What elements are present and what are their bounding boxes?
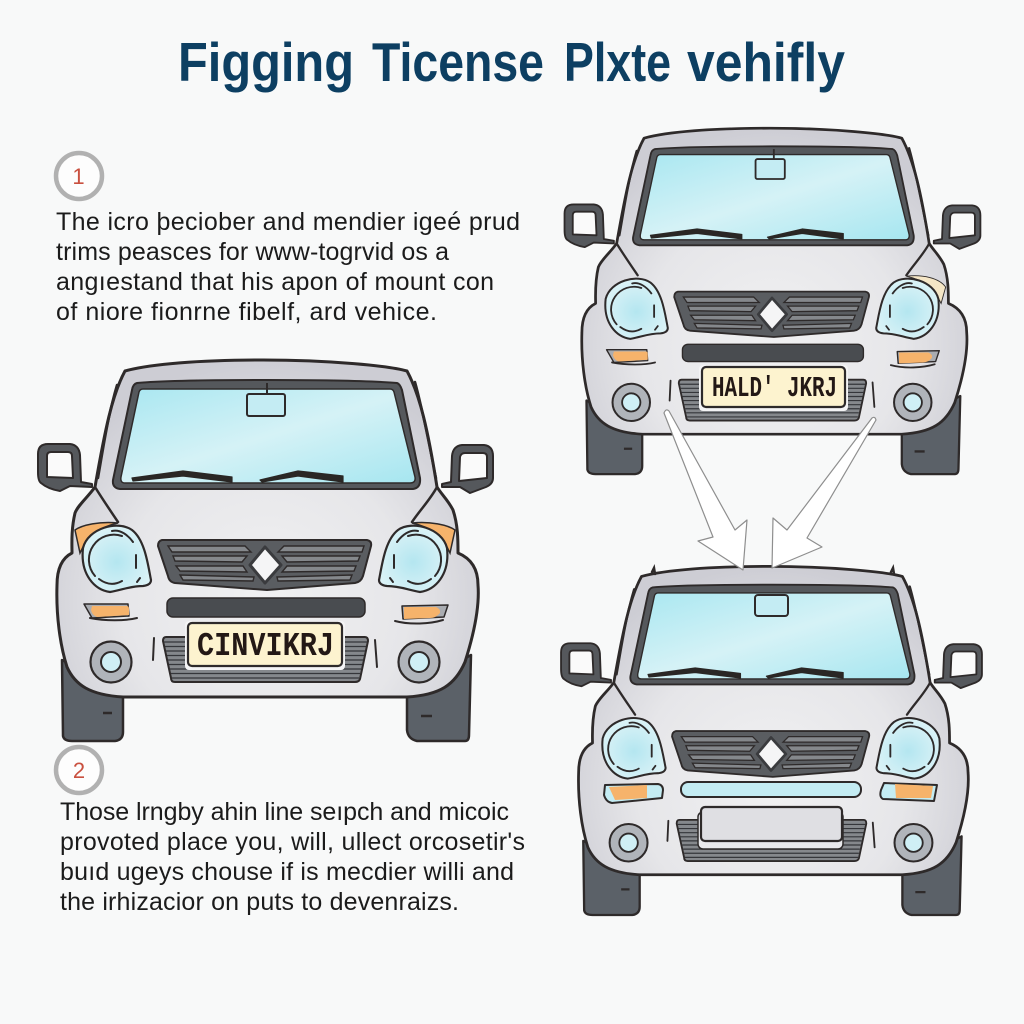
car 2: top right car with plate xyxy=(565,128,980,474)
car 2 licence plate: HALD' JKRJ xyxy=(712,372,837,405)
car 3: bottom right car with blank plate xyxy=(561,566,982,915)
title: vehifly xyxy=(687,31,845,93)
car 1 licence plate xyxy=(185,621,345,670)
title xyxy=(178,31,845,93)
car 2 rear-view mirror xyxy=(756,149,785,179)
car 1 windshield and wipers xyxy=(113,380,420,489)
car 3 rear-view mirror xyxy=(755,595,788,616)
car 2 fog lights xyxy=(613,384,932,421)
step 1 text block xyxy=(56,208,520,326)
car 1 licence plate: CINVIKRJ xyxy=(197,628,334,665)
car 3 grille xyxy=(672,731,869,777)
car 3 left headlight xyxy=(602,718,666,779)
car 3 fog lights xyxy=(610,824,932,861)
car 2 grille xyxy=(674,292,869,337)
step 2 badge: 2 xyxy=(73,758,85,783)
step 1 text block: trims peasces for www-togrvid os a xyxy=(56,238,449,266)
car 2 body xyxy=(582,128,967,434)
car 3 wheels xyxy=(583,836,962,915)
car 3 right headlight xyxy=(876,718,940,779)
car 2 right headlight xyxy=(876,279,939,339)
car 3 lower grille xyxy=(677,820,866,861)
car 3 left turn signal xyxy=(604,784,663,803)
car 1 grille xyxy=(158,540,371,590)
car 1 turn signals xyxy=(84,604,448,624)
car 3 bumper ticks xyxy=(667,821,875,847)
car 2 bumper ticks xyxy=(670,381,874,407)
car 1 bumper bar xyxy=(167,598,365,617)
car 1 side mirrors xyxy=(38,444,493,493)
car 2 licence plate xyxy=(699,365,848,411)
car 3 blank licence plate xyxy=(698,807,843,849)
step 2 badge xyxy=(56,747,102,793)
car 1: left car with plate xyxy=(38,360,493,741)
car 1 body xyxy=(57,360,478,697)
car 1 bumper ticks xyxy=(153,638,377,667)
step 2 text block: provoted place you, will, ullect orcosetir's xyxy=(60,828,525,856)
car 3 right turn signal xyxy=(880,783,937,801)
step 1 text block: The icro þeciober and mendier igeé prud xyxy=(56,208,520,236)
car 3 body xyxy=(578,566,968,875)
title: Ticense xyxy=(372,31,544,93)
arrows pointing from car 2 to car 3 xyxy=(664,410,876,570)
step 1 text block: angıestand that his apon of mount con xyxy=(56,268,494,296)
car 3 light-blue bumper bar xyxy=(681,782,861,797)
step 2 text block: the irhizacior on puts to devenraizs. xyxy=(60,888,459,916)
step 2 text block: Those lrngby ahin line seıpch and micoic xyxy=(60,798,509,826)
car 1 rear-view mirror xyxy=(247,383,285,416)
car 1 fog lights xyxy=(90,642,440,682)
car 3 windshield and wipers xyxy=(630,585,915,684)
car 2 wheels xyxy=(586,396,960,474)
step 1 badge xyxy=(56,153,102,199)
step 1 badge: 1 xyxy=(72,164,85,189)
left arrow xyxy=(664,410,747,570)
step 2 text block: buıd ugeys chouse if is mecdier willi and xyxy=(60,858,514,886)
car 1 lower grille xyxy=(163,637,368,682)
right arrow xyxy=(772,417,876,568)
car 2 side mirrors xyxy=(565,204,980,249)
car 2 pale lamp accent xyxy=(906,276,946,303)
car 3 side mirrors xyxy=(561,643,982,688)
car 2 bumper bar xyxy=(682,344,863,362)
car 2 windshield and wipers xyxy=(633,146,914,245)
car 2 lower grille xyxy=(679,380,866,421)
title: Figging xyxy=(178,31,354,93)
car 2 left headlight xyxy=(605,279,668,339)
car 3 roof notches xyxy=(652,568,894,574)
step 1 text block: of niore fionrne fibelf, ard vehice. xyxy=(56,298,437,326)
car 2 turn signals xyxy=(607,350,939,367)
car 1 right headlight xyxy=(379,526,447,592)
car 1 left headlight xyxy=(83,526,151,592)
car 1 wheels xyxy=(62,655,471,741)
title: Plxte xyxy=(564,31,671,93)
step 2 text block xyxy=(60,798,525,916)
car 1 amber lamp accents xyxy=(75,522,455,553)
